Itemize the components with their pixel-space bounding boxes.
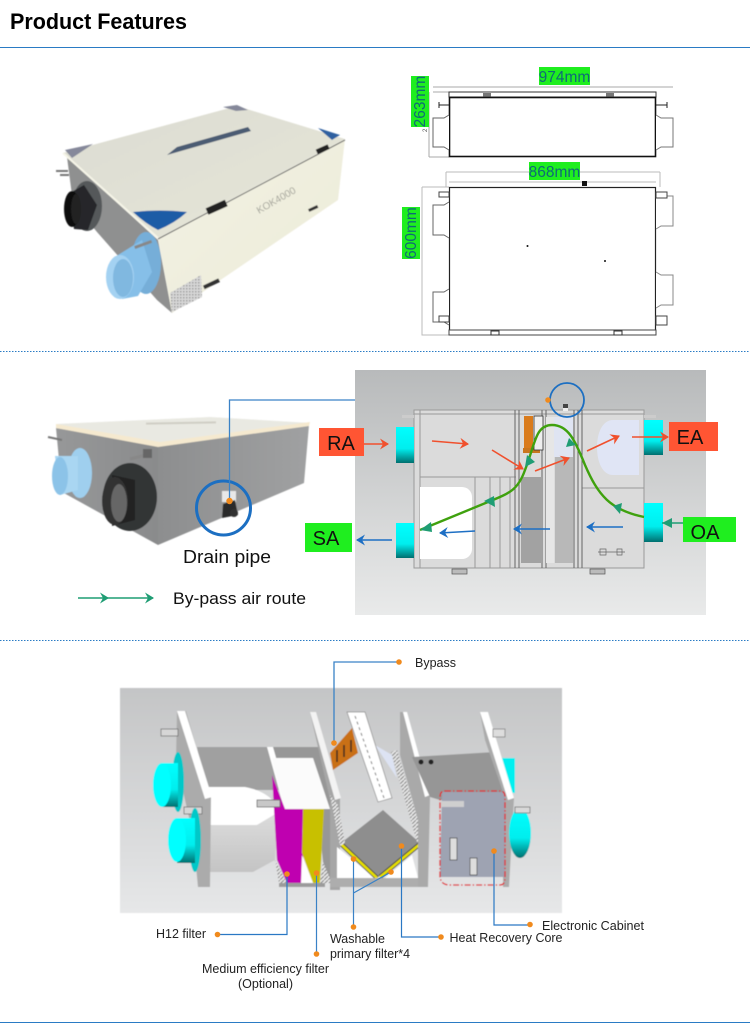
callout: drain pipe location on diagram — [545, 383, 584, 417]
label: Drain pipe: Drain pipe — [183, 547, 271, 567]
callout: Electronic Cabinet — [491, 848, 645, 933]
product photo: grey side with drain pipe — [48, 417, 310, 545]
arrow: by-pass air route — [420, 425, 644, 530]
arrows: supply air route — [357, 527, 623, 540]
callout: Electronic Cabinet: Electronic Cabinet — [542, 919, 645, 933]
icon: cyan duct ports — [396, 420, 663, 558]
callout: drain pipe leader — [196, 400, 548, 535]
callout: Medium efficiency filter: (Optional) — [238, 977, 293, 991]
icon: blue duct — [52, 448, 92, 498]
legend: by-pass air route: By-pass air route — [173, 590, 306, 608]
icon: black duct — [102, 463, 157, 531]
callout: Medium efficiency filter: Medium efficiency filter — [202, 962, 329, 976]
icons: by-pass arrowheads — [420, 438, 672, 532]
filter: medium efficiency yellow — [302, 809, 324, 883]
callout: H12 filter: H12 filter — [156, 927, 206, 941]
right section with electronic cabinet — [412, 712, 531, 887]
product photo: cream ventilation unit — [56, 105, 345, 313]
filter: H12 purple — [272, 775, 305, 883]
callout: Heat Recovery Core: Heat Recovery Core — [450, 931, 563, 945]
filter module — [257, 712, 341, 890]
label: 974mm: 974mm — [539, 69, 590, 86]
icon: cyan ducts left — [153, 752, 201, 872]
label: EA — [669, 422, 718, 451]
label: OA: OA — [691, 522, 720, 544]
panel: exploded internal view — [120, 688, 562, 913]
dimension drawing: side view — [411, 67, 673, 157]
label: RA — [319, 428, 364, 456]
callout: Bypass: Bypass — [415, 656, 456, 670]
callout: Bypass — [331, 656, 456, 746]
dimension drawing: top view — [402, 162, 673, 335]
label: SA: SA — [313, 528, 340, 550]
icon: black duct — [64, 181, 102, 231]
label: EA: EA — [677, 427, 704, 449]
label: 600mm: 600mm — [403, 207, 420, 259]
arrows: exhaust air route — [364, 436, 668, 471]
callout: Washable primary filter — [330, 856, 410, 961]
callout: Medium efficiency filter — [202, 870, 329, 991]
callout: Washable primary filter: primary filter*4 — [330, 947, 410, 961]
label: OA — [683, 517, 736, 544]
callout: Washable primary filter: Washable — [330, 932, 385, 946]
callout: Heat Recovery Core — [399, 843, 563, 945]
label: 868mm: 868mm — [529, 164, 580, 181]
icon: blue duct — [106, 232, 161, 299]
left section — [161, 711, 282, 887]
icon: orange bypass damper — [330, 728, 358, 770]
label: SA — [305, 523, 352, 552]
label: 263mm: 263mm — [412, 76, 429, 127]
product photo: cream ventilation unit: KOK4000 — [255, 185, 298, 217]
label: RA: RA — [327, 433, 356, 455]
panel: airflow diagram — [355, 370, 706, 615]
callout: H12 filter — [156, 871, 290, 941]
title: Product Features — [10, 9, 187, 34]
core module — [330, 712, 430, 887]
dimension drawing: side view: 2 — [423, 128, 429, 132]
icon: orange bypass damper — [523, 416, 543, 453]
